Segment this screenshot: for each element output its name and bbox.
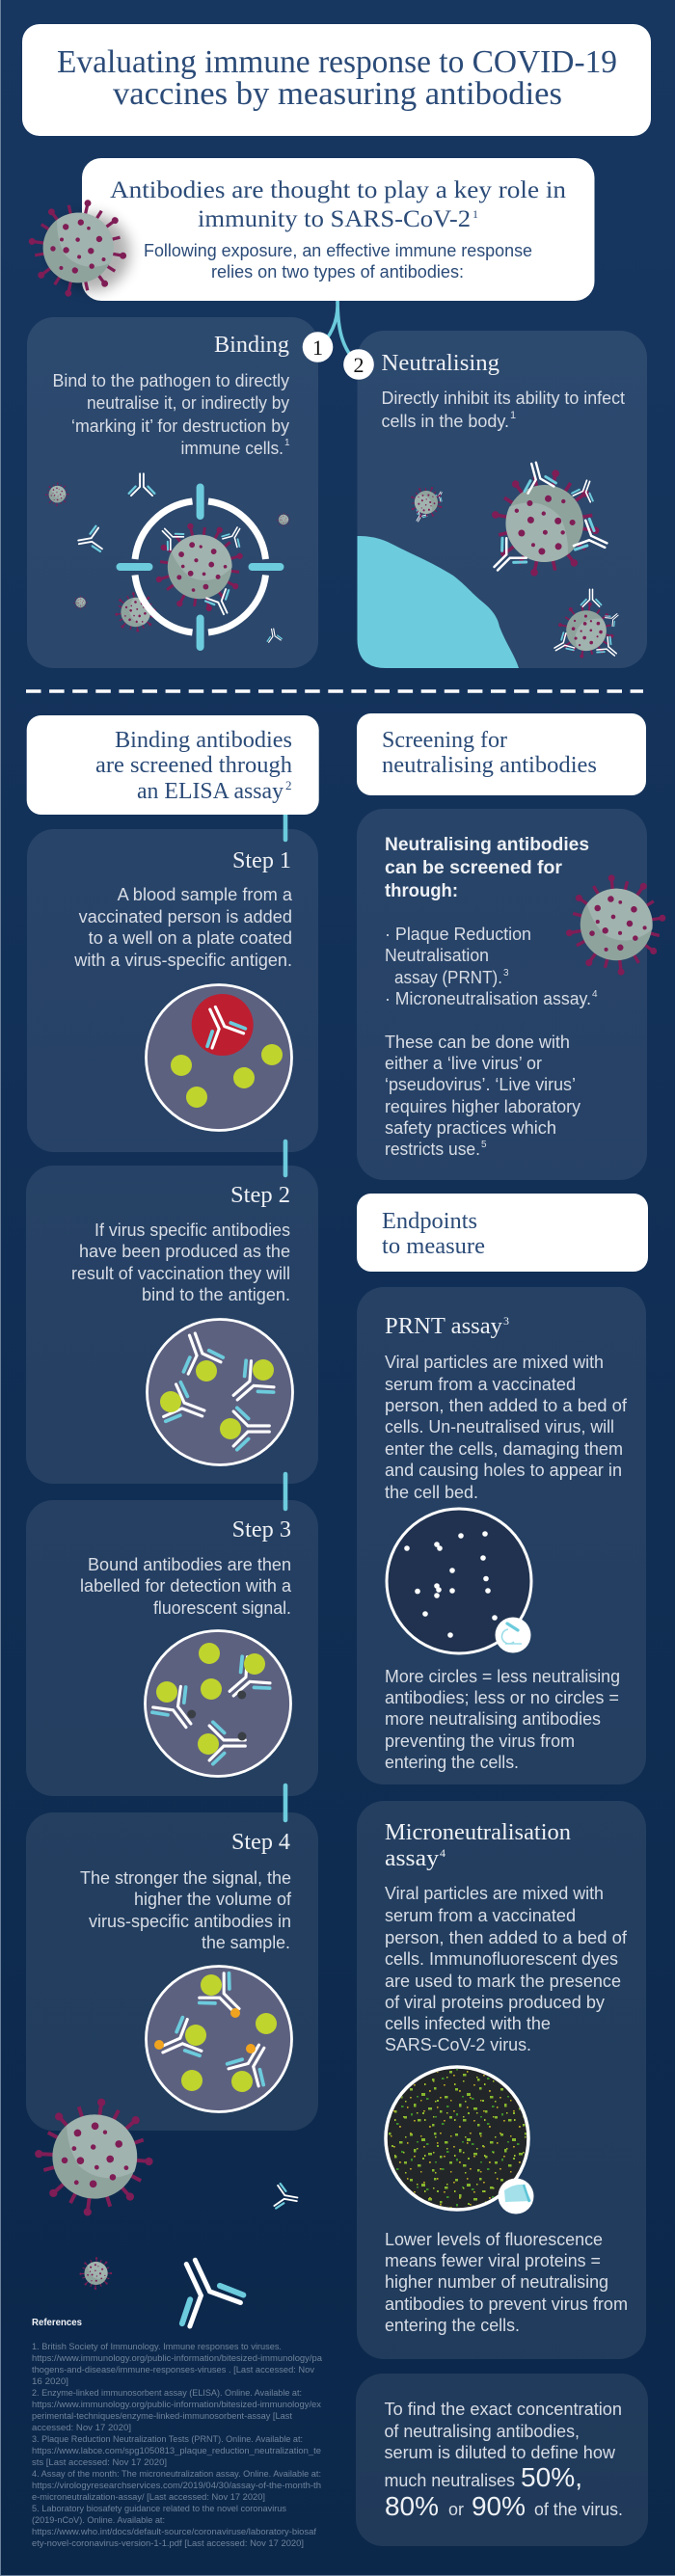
PRNT result text: preventing the virus from: [385, 1731, 575, 1751]
badge: number 1: [303, 332, 333, 362]
live virus text: 5: [481, 1140, 487, 1150]
microneutralisation result text: antibodies to prevent virus from: [385, 2294, 628, 2314]
icon: virus on intro box: [20, 191, 135, 306]
concentration text: serum is diluted to define how: [384, 2443, 616, 2462]
PRNT result text: antibodies; less or no circles =: [385, 1688, 619, 1707]
PRNT result text: More circles = less neutralising: [385, 1667, 620, 1686]
live virus text: requires higher laboratory: [385, 1097, 580, 1116]
intro box: [82, 158, 594, 301]
heading: endpoints to measure: [357, 1194, 648, 1272]
screening bold intro: Neutralising antibodies: [385, 835, 589, 855]
binding text: 1: [284, 438, 290, 448]
title: vaccines by measuring antibodies: [113, 76, 562, 112]
assay list: 4: [592, 989, 598, 1000]
references: perimental-techniques/enzyme-linked-immunosorbent-assay [Last: [32, 2411, 292, 2422]
live virus text: These can be done with: [385, 1033, 570, 1052]
microneutralisation text: [385, 1884, 628, 2054]
step 3 text: labelled for detection with a: [80, 1576, 292, 1596]
PRNT heading: PRNT assay: [385, 1314, 502, 1339]
heading: binding antibodies: Binding antibodies: [115, 728, 292, 753]
references: 3. Plaque Reduction Neutralization Tests (PRNT). Online. Available at:: [32, 2434, 303, 2445]
microneutralisation text: cells infected with the: [385, 2014, 551, 2033]
concentration text: or: [448, 2500, 464, 2519]
panel: neutralising screening: [357, 809, 673, 1180]
references: https://www.labce.com/spg1050813_plaque_reduction_neutralization_te: [32, 2446, 321, 2456]
binding illustration: small viruses and free antibodies: [45, 473, 290, 643]
PRNT result text: more neutralising antibodies: [385, 1709, 601, 1729]
microneutralisation heading: 4: [440, 1846, 446, 1860]
concentration text: of the virus.: [534, 2500, 623, 2519]
well: labelled antibodies: [145, 1631, 291, 1776]
neutralising text: [382, 389, 625, 431]
microneutralisation text: Viral particles are mixed with: [385, 1884, 604, 1903]
references: https://www.immunology.org/public-information/bitesized-immunology/ex: [32, 2400, 321, 2410]
heading: binding antibodies: an ELISA assay: [137, 779, 284, 804]
neutralising heading: Neutralising: [382, 351, 500, 376]
binding text: neutralise it, or indirectly by: [87, 393, 289, 413]
step 1 text: [73, 885, 293, 970]
references: sts [Last accessed: Nov 17 2020]: [32, 2457, 167, 2468]
assay list: Neutralisation: [385, 946, 489, 965]
references: 1. British Society of Immunology. Immune responses to viruses.: [32, 2342, 282, 2352]
concentration text: To find the exact concentration: [384, 2400, 622, 2419]
icon: small antibody: [274, 2184, 299, 2212]
step 1 text: to a well on a plate coated: [89, 928, 292, 948]
step 4 heading: Step 4: [231, 1830, 290, 1855]
target reticle around virus: [120, 488, 280, 647]
microneutralisation text: serum from a vaccinated: [385, 1906, 576, 1925]
concentration text: much neutralises: [384, 2471, 515, 2490]
panel: neutralising: [357, 331, 647, 668]
intro box: Antibodies are thought to play a key role in: [110, 177, 567, 203]
microneutralisation text: SARS-CoV-2 virus.: [385, 2035, 531, 2054]
PRNT text: person, then added to a bed of: [385, 1396, 628, 1415]
PRNT text: enter the cells, damaging them: [385, 1439, 623, 1459]
well: fluorescent signal: [147, 1967, 291, 2111]
neutralised viruses with antibodies: [406, 459, 622, 663]
assay list: [385, 925, 598, 1008]
references: thogens-and-disease/immune-responses-viruses . [Last accessed: Nov: [32, 2365, 314, 2375]
step 3 text: [80, 1555, 292, 1618]
icon: plate badge: [498, 2179, 534, 2214]
references: accessed: Nov 17 2020]: [32, 2423, 131, 2433]
panel: microneutralisation assay: [357, 1801, 646, 2359]
live virus text: restricts use.: [385, 1140, 480, 1159]
icon: large virus bottom left: [30, 2093, 158, 2221]
panel: step 3: [26, 1500, 318, 1796]
cell bed with plaques: [387, 1509, 531, 1653]
step 1 heading: Step 1: [232, 848, 291, 873]
live virus text: safety practices which: [385, 1118, 556, 1138]
references: 5. Laboratory biosafety guidance related to the novel coronavirus: [32, 2504, 286, 2514]
microneutralisation heading: [385, 1820, 571, 1871]
step 2 heading: Step 2: [230, 1183, 290, 1208]
step 1 text: A blood sample from a: [118, 885, 293, 904]
screening bold intro: [385, 835, 589, 901]
microneutralisation result text: entering the cells.: [385, 2316, 520, 2335]
assay list: 3: [503, 968, 509, 979]
references: 4. Assay of the month: The microneutralization assay. Online. Available at:: [32, 2469, 321, 2480]
step 4 text: the sample.: [202, 1933, 290, 1952]
binding text: [52, 371, 290, 458]
references: 16 2020]: [32, 2376, 68, 2387]
PRNT result text: [385, 1667, 620, 1772]
binding heading: Binding: [214, 333, 289, 358]
title: [22, 24, 651, 136]
cell: [357, 536, 519, 668]
dashed divider: [26, 689, 643, 693]
panel: step 1: [27, 829, 318, 1152]
step 2 text: [71, 1221, 290, 1304]
badge: number 2: 2: [353, 353, 364, 377]
PRNT text: the cell bed.: [385, 1483, 478, 1502]
step 1 text: with a virus-specific antigen.: [73, 951, 292, 970]
icon: large antibody: [160, 2248, 246, 2329]
step 3 text: Bound antibodies are then: [88, 1555, 291, 1574]
microneutralisation result text: means fewer viral proteins =: [385, 2251, 601, 2270]
microneutralisation result text: higher number of neutralising: [385, 2272, 608, 2292]
concentration text: 80%: [385, 2491, 439, 2521]
icon: small virus: [79, 2257, 112, 2290]
step 2 text: have been produced as the: [79, 1242, 290, 1261]
microneutralisation heading: assay: [385, 1846, 439, 1871]
heading: binding antibodies: [27, 715, 319, 815]
references: ety-novel-coronavirus-version-1-1.pdf [Last accessed: Nov 17 2020]: [32, 2538, 304, 2549]
step 2 text: bind to the antigen.: [142, 1285, 290, 1304]
step 4 text: virus-specific antibodies in: [89, 1912, 291, 1931]
title: Evaluating immune response to COVID-19: [57, 44, 617, 80]
PRNT text: serum from a vaccinated: [385, 1375, 576, 1394]
assay list: assay (PRNT).: [394, 968, 502, 987]
step 3 heading: Step 3: [232, 1517, 291, 1543]
PRNT text: [385, 1353, 628, 1502]
panel: concentration: [356, 2374, 648, 2546]
panel: step 4: [26, 1812, 318, 2131]
assay list: · Microneutralisation assay.: [385, 989, 591, 1008]
references: References: [32, 2318, 82, 2328]
step 4 text: [80, 1868, 292, 1952]
step 1 text: vaccinated person is added: [79, 907, 292, 926]
step 4 text: The stronger the signal, the: [80, 1868, 291, 1888]
well: blood sample: [147, 985, 291, 1130]
PRNT result text: entering the cells.: [385, 1753, 519, 1772]
well: antibodies bound to antigen: [147, 1319, 293, 1465]
screening bold intro: through:: [385, 881, 458, 901]
microneutralisation text: of viral proteins produced by: [385, 1993, 605, 2012]
references: 2. Enzyme-linked immunosorbent assay (ELISA). Online. Available at:: [32, 2388, 302, 2399]
binding text: immune cells.: [181, 439, 284, 458]
heading: screening for neutralising antibodies: Screening for: [382, 728, 507, 753]
icon: microscope: [496, 1618, 530, 1652]
intro box: immunity to SARS-CoV-2: [198, 206, 471, 232]
references: https://www.who.int/docs/default-source/coronaviruse/laboratory-biosaf: [32, 2527, 316, 2537]
panel: binding: [27, 317, 318, 668]
microneutralisation result text: [385, 2230, 628, 2335]
microneutralisation text: cells. Immunofluorescent dyes: [385, 1949, 618, 1969]
live virus text: [385, 1033, 580, 1159]
neutralising text: Directly inhibit its ability to infect: [382, 389, 625, 408]
microneutralisation result text: Lower levels of fluorescence: [385, 2230, 603, 2249]
references: [32, 2318, 323, 2549]
live virus text: ‘pseudovirus’. ‘Live virus’: [385, 1075, 576, 1094]
concentration text: [384, 2400, 623, 2521]
heading: endpoints to measure: to measure: [382, 1234, 485, 1259]
references: e-microneutralization-assay/ [Last accessed: Nov 17 2020]: [32, 2492, 265, 2503]
heading: binding antibodies: are screened through: [95, 753, 292, 778]
connector: intro to antibody types: [322, 299, 359, 364]
intro box: relies on two types of antibodies:: [211, 262, 464, 282]
concentration text: 50%,: [521, 2462, 582, 2492]
heading: screening for neutralising antibodies: neutralising antibodies: [382, 753, 597, 778]
step 4 text: higher the volume of: [134, 1890, 292, 1909]
microneutralisation heading: Microneutralisation: [385, 1820, 571, 1845]
neutralising text: 1: [510, 410, 516, 421]
badge: number 1: 1: [312, 335, 323, 360]
step 2 text: result of vaccination they will: [71, 1264, 290, 1283]
binding text: ‘marking it’ for destruction by: [71, 416, 289, 436]
step 3 text: fluorescent signal.: [153, 1598, 291, 1618]
heading: binding antibodies: 2: [285, 778, 291, 792]
microneutralisation text: person, then added to a bed of: [385, 1928, 628, 1947]
PRNT text: cells. Un-neutralised virus, will: [385, 1417, 614, 1436]
microneutralisation text: are used to mark the presence: [385, 1972, 621, 1991]
concentration text: of neutralising antibodies,: [384, 2422, 580, 2441]
badge: number 2: [343, 349, 374, 380]
panel: step 2: [26, 1166, 318, 1484]
references: https://virologyresearchservices.com/2019/04/30/assay-of-the-month-th: [32, 2481, 321, 2491]
concentration text: 90%: [472, 2491, 526, 2521]
heading: endpoints to measure: Endpoints: [382, 1209, 477, 1234]
heading: screening for neutralising antibodies: [357, 713, 646, 795]
assay list: · Plaque Reduction: [385, 925, 531, 944]
PRNT text: and causing holes to appear in: [385, 1461, 622, 1480]
live virus text: either a ‘live virus’ or: [385, 1054, 542, 1073]
PRNT text: Viral particles are mixed with: [385, 1353, 604, 1372]
step 2 text: If virus specific antibodies: [94, 1221, 290, 1240]
fluorescence image: [386, 2067, 528, 2210]
intro box: Following exposure, an effective immune response: [144, 241, 532, 260]
panel: PRNT assay: [357, 1287, 646, 1784]
binding text: Bind to the pathogen to directly: [52, 371, 289, 390]
neutralising text: cells in the body.: [382, 412, 509, 431]
references: (2019-nCoV). Online. Available at:: [32, 2515, 165, 2526]
PRNT heading: 3: [503, 1314, 509, 1328]
connectors between steps: [284, 815, 287, 1820]
icon: virus: [558, 868, 673, 982]
screening bold intro: can be screened for: [385, 858, 563, 878]
intro box: 1: [472, 207, 478, 221]
references: https://www.immunology.org/public-information/bitesized-immunology/pa: [32, 2353, 323, 2364]
